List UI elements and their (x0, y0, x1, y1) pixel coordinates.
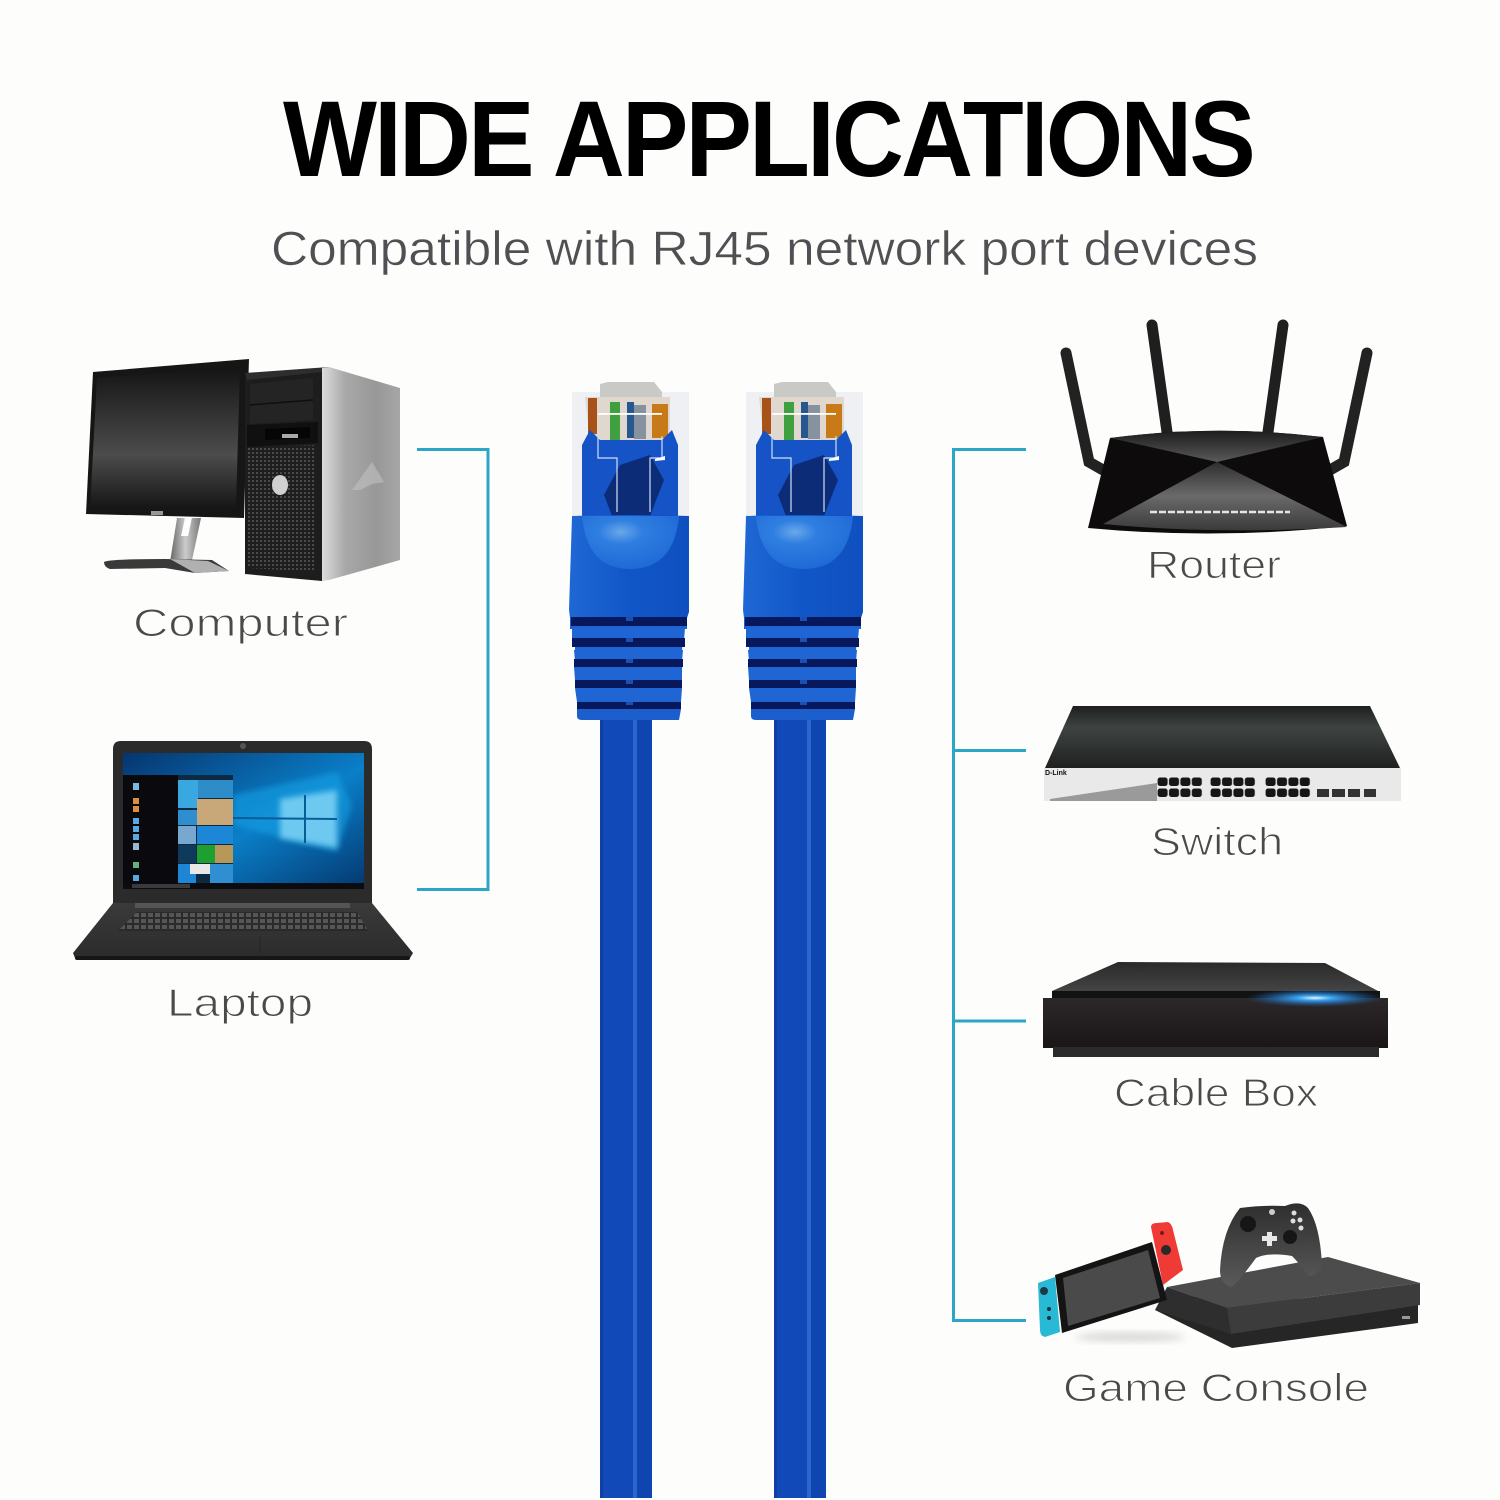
cable box foot (1053, 1047, 1379, 1057)
subtitle: Compatible with RJ45 network port devices (271, 223, 1258, 276)
tower (245, 367, 400, 581)
monitor stand (104, 518, 229, 573)
connector line: right devices (953, 450, 1026, 1320)
xbox console (1155, 1257, 1420, 1348)
cable connector: left (569, 382, 689, 1498)
label: Switch: Switch (1151, 821, 1283, 864)
icon: cable box (1043, 962, 1388, 1057)
nintendo switch (1038, 1222, 1183, 1337)
icon: network switch (1044, 706, 1401, 801)
label: Router: Router (1147, 544, 1281, 587)
connector line: left devices (417, 450, 488, 890)
switch top (1045, 706, 1400, 768)
icon: router (1066, 325, 1367, 534)
label: Cable Box: Cable Box (1114, 1072, 1319, 1115)
xbox controller (1220, 1203, 1322, 1287)
monitor (86, 359, 249, 518)
console shadow (1075, 1333, 1185, 1341)
cable box front (1043, 998, 1388, 1048)
switch front panel (1044, 768, 1401, 801)
clear plug (572, 382, 689, 516)
label: Game Console: Game Console (1063, 1367, 1369, 1410)
cable box top (1052, 962, 1380, 998)
title: WIDE APPLICATIONS (283, 78, 1253, 199)
icon: desktop computer (86, 359, 400, 581)
icon: game consoles (1038, 1203, 1420, 1348)
label: Laptop: Laptop (167, 982, 313, 1025)
router body (1088, 431, 1347, 534)
laptop base (73, 903, 413, 960)
cable connector: right (743, 382, 863, 1498)
antennas (1066, 325, 1367, 470)
laptop lid (113, 741, 372, 903)
label: Computer: Computer (133, 602, 348, 645)
switch front panel: D-Link (1045, 770, 1067, 777)
icon: laptop (73, 741, 413, 960)
blue light (1245, 989, 1385, 1007)
strain relief boot (569, 515, 689, 720)
cable (600, 718, 652, 1498)
